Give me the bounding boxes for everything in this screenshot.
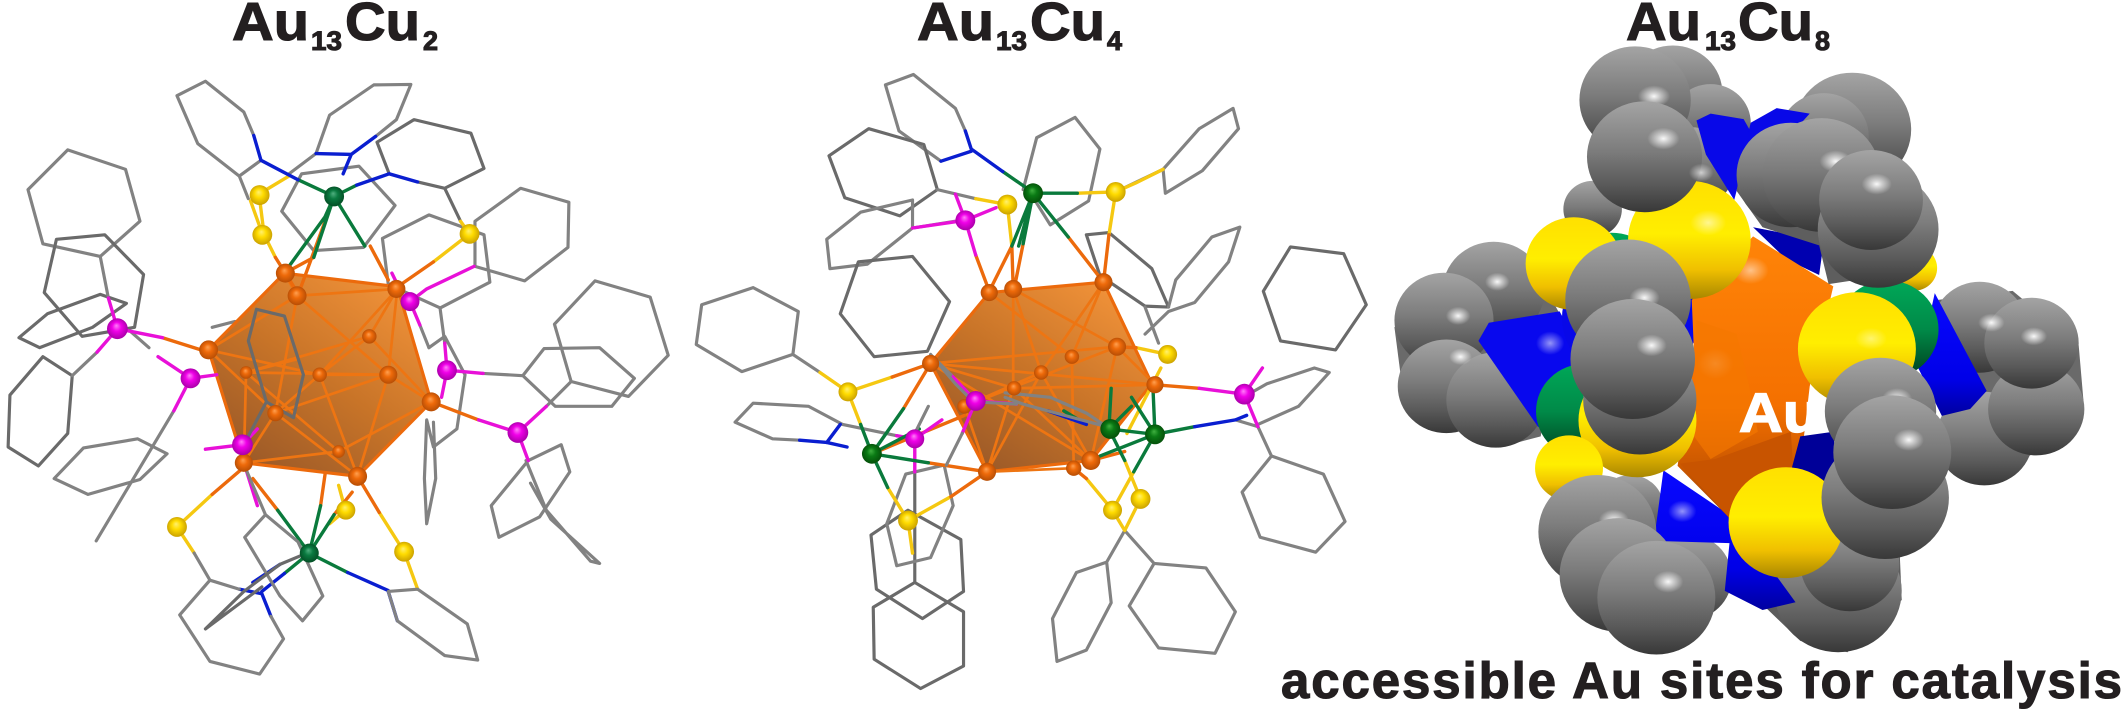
- back carbon spheres: [1394, 45, 2084, 652]
- green copper spheres: [1536, 233, 1939, 489]
- atoms: [107, 185, 528, 563]
- panel: Au13Cu8 space-filling model: [1394, 45, 2084, 654]
- title: Au13Cu2: 13: [311, 26, 342, 56]
- back ligand rings: [696, 74, 1366, 689]
- panel: Au13Cu2 ball-and-stick structure: [8, 81, 668, 674]
- Au13 icosahedron: [209, 273, 431, 476]
- panel: Au13Cu4 ball-and-stick structure: [696, 74, 1366, 689]
- front carbon spheres: [1538, 46, 1951, 654]
- Au13 icosahedron: [931, 282, 1155, 472]
- title: Au13Cu2: 2: [423, 26, 438, 56]
- title: Au13Cu8: 8: [1815, 26, 1830, 56]
- title: Au13Cu4: 4: [1107, 26, 1122, 56]
- coordination bonds: [800, 131, 1262, 553]
- caption: accessible Au sites for catalysis: [1281, 652, 2122, 709]
- title: Au13Cu8: 13: [1705, 26, 1736, 56]
- gold core: [1678, 236, 1833, 518]
- title: Au13Cu2: [232, 0, 438, 56]
- nitrogen blue regions: [1478, 108, 1987, 610]
- label: Au: Au: [1739, 382, 1820, 444]
- back ligand rings: [8, 81, 668, 563]
- title: Au13Cu4: [917, 0, 1122, 56]
- yellow sulfur spheres: [1526, 181, 1916, 578]
- atoms: [838, 182, 1255, 531]
- coordination bonds: [97, 135, 546, 674]
- title: Au13Cu4: 13: [996, 26, 1027, 56]
- title: Au13Cu8: [1626, 0, 1830, 56]
